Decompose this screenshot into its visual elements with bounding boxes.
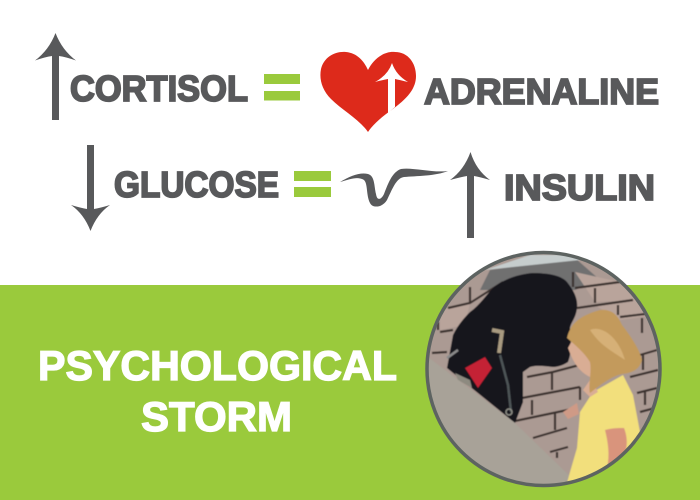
icon: insulin up arrow [450,152,490,238]
equals sign: cortisol [264,74,300,100]
icon: insulin curve [340,169,448,207]
insulin label: INSULIN [504,167,655,208]
title: psychological storm: PSYCHOLOGICAL [38,342,397,389]
dog harness [447,330,512,415]
photo: service dog and child [425,250,662,488]
equals sign: glucose [294,171,331,197]
title: psychological storm [38,342,397,440]
concrete wall foreground [458,380,514,424]
dog [447,273,577,423]
icon: cortisol up arrow [35,33,76,120]
icon: heart with up arrow [320,52,416,132]
child [563,310,642,490]
adrenaline label: ADRENALINE [424,71,659,112]
glucose label: GLUCOSE [114,164,279,205]
icon: glucose down arrow [71,145,110,231]
title: psychological storm: STORM [141,393,292,440]
cortisol label: CORTISOL [70,68,248,109]
green band [0,285,700,500]
brick wall [429,254,658,476]
